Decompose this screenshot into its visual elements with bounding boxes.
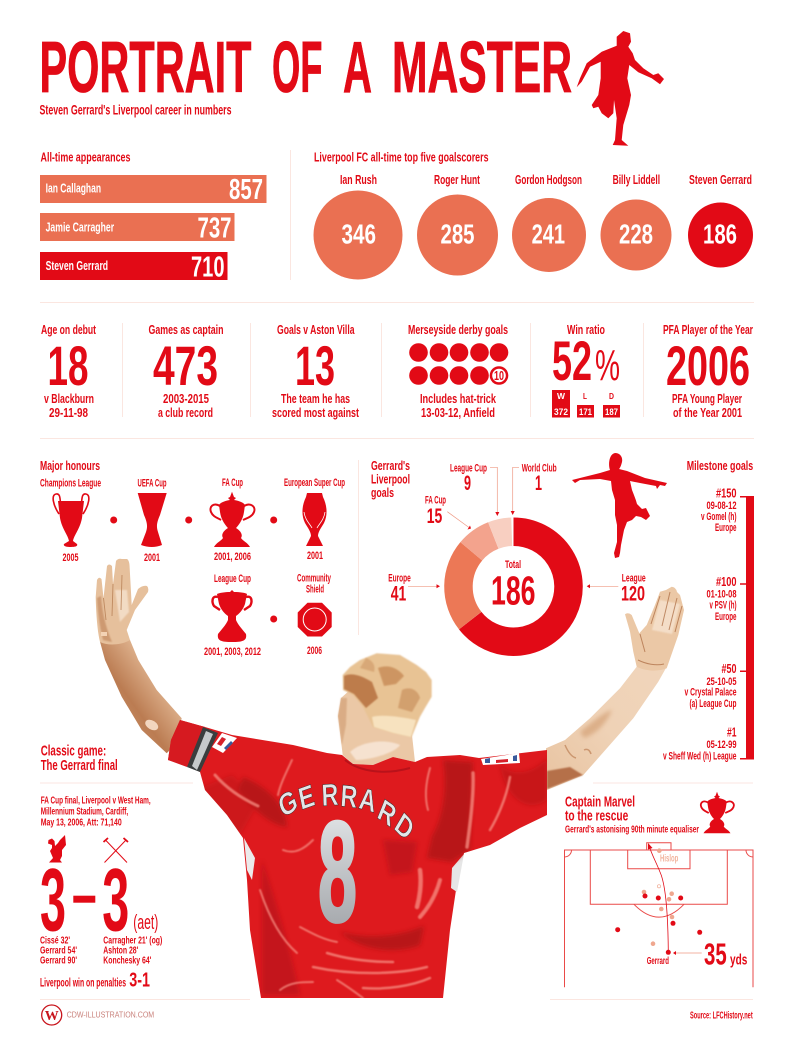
icon: West Ham crossed hammers bbox=[104, 838, 128, 862]
West Ham scorers: Ashton 28' bbox=[103, 944, 138, 956]
trophy: FA Cup: FA Cup bbox=[222, 477, 243, 489]
Liverpool scorers: Cissé 32' bbox=[40, 934, 70, 946]
stat: Merseyside derby goals: Merseyside derby goals bbox=[408, 323, 508, 337]
logo: CDW illustration: CDW-ILLUSTRATION.COM bbox=[67, 1010, 154, 1020]
milestone: #1 bbox=[663, 725, 736, 762]
heading: Captain Marvel: Captain Marvel bbox=[565, 794, 635, 811]
West Ham scorers bbox=[103, 934, 162, 966]
panel: top five goalscorers bbox=[314, 151, 753, 280]
jersey name GERRARD: GERRARD bbox=[274, 777, 419, 847]
defenders and keeper bbox=[642, 848, 674, 946]
heading: classic game: The Gerrard final bbox=[41, 757, 118, 774]
Liverpool scorers bbox=[40, 934, 77, 966]
logo: CDW illustration: W bbox=[45, 1009, 59, 1024]
stat: age on debut: 18 bbox=[48, 334, 88, 397]
label: League Cup: 9 bbox=[464, 472, 471, 495]
milestone: #50: 25-10-05 bbox=[706, 676, 736, 688]
arrow to shot distance bbox=[673, 951, 702, 955]
stat: games as captain: Games as captain bbox=[148, 323, 224, 337]
bar: Steven Gerrard bbox=[40, 252, 228, 284]
stat: age on debut: v Blackburn bbox=[44, 392, 94, 406]
score 3-3: 3 bbox=[40, 850, 66, 950]
match details: May 13, 2006, Att: 71,140 bbox=[41, 817, 122, 829]
pitch diagram bbox=[564, 843, 753, 987]
scorer: Steven Gerrard: Steven Gerrard bbox=[689, 173, 752, 187]
panel: Gerrard's Liverpool goals bbox=[371, 453, 667, 642]
scorer: Roger Hunt bbox=[417, 173, 498, 276]
milestone: #150: 09-08-12 bbox=[706, 500, 736, 512]
heading: Captain Marvel: Gerrard's astonising 90th minute equaliser bbox=[565, 823, 699, 835]
win, loss, draw boxes: L bbox=[583, 391, 587, 401]
captain's cuff bbox=[168, 720, 205, 767]
neck bbox=[338, 690, 415, 765]
donut total bbox=[491, 559, 536, 614]
milestone: #50 bbox=[684, 661, 737, 710]
stat: PFA Player of the Year bbox=[663, 323, 753, 420]
bar: Ian Callaghan: Ian Callaghan bbox=[46, 182, 101, 196]
trophy: UEFA Cup: 2001 bbox=[144, 552, 160, 564]
left arm bbox=[100, 640, 182, 753]
trophy: Champions League: Champions League bbox=[40, 478, 101, 490]
stat: PFA Player of the Year: of the Year 2001 bbox=[673, 406, 742, 420]
stat: PFA Player of the Year: PFA Player of the Year bbox=[663, 323, 753, 337]
illustration: Gerrard arms raised, seen from behind: 8 bbox=[318, 793, 357, 952]
label: Europe: 41 bbox=[391, 583, 406, 606]
bar: Jamie Carragher: 737 bbox=[198, 212, 232, 244]
heading: goals breakdown: goals bbox=[371, 486, 394, 500]
heading: goals breakdown: Liverpool bbox=[371, 472, 410, 486]
icon: small FA Cup bbox=[701, 792, 734, 833]
milestone: #100: v PSV (h) bbox=[710, 600, 737, 612]
donut chart bbox=[458, 532, 569, 642]
penalties result: Liverpool win on penalties bbox=[40, 976, 126, 990]
stat: age on debut: 29-11-98 bbox=[49, 406, 88, 420]
label: World Club: World Club bbox=[522, 463, 557, 475]
milestone: #150 bbox=[701, 485, 737, 534]
heading: classic game: Classic game: bbox=[41, 742, 106, 759]
Liverpool scorers: Gerrard 90' bbox=[40, 954, 77, 966]
heading: milestone goals: Milestone goals bbox=[687, 459, 753, 473]
stat: win ratio: % bbox=[595, 341, 620, 390]
label: World Club: 1 bbox=[535, 472, 542, 495]
heading: goalscorers: Liverpool FC all-time top five goalscorers bbox=[314, 151, 489, 165]
trophy: Community Shield: 2006 bbox=[307, 645, 322, 657]
panel: major honours bbox=[40, 459, 345, 658]
stat: win ratio: 52 bbox=[552, 329, 592, 392]
stat: win ratio: Win ratio bbox=[567, 323, 605, 337]
trophy: Community Shield bbox=[297, 572, 332, 657]
stat: goals v Aston Villa: Goals v Aston Villa bbox=[277, 323, 355, 337]
stat: win ratio bbox=[552, 323, 620, 418]
stat: goals v Aston Villa bbox=[272, 323, 360, 420]
heading: Captain Marvel: to the rescue bbox=[565, 808, 628, 825]
panel: all-time appearances bbox=[40, 151, 266, 284]
stat: goals v Aston Villa: The team he has bbox=[281, 392, 350, 406]
stat: age on debut: Age on debut bbox=[41, 323, 97, 337]
label: League: League bbox=[622, 573, 646, 585]
label: Europe bbox=[388, 573, 440, 606]
shot distance: 35 bbox=[704, 937, 727, 971]
bar: Ian Callaghan bbox=[40, 174, 266, 206]
pitch markings bbox=[564, 843, 753, 987]
milestone: #150: Europe bbox=[715, 522, 736, 534]
label: League bbox=[587, 573, 646, 606]
trophy: UEFA Cup bbox=[138, 478, 167, 564]
heading: goals breakdown: Gerrard's bbox=[371, 459, 410, 473]
milestone: #50: v Crystal Palace bbox=[684, 687, 736, 699]
title bbox=[40, 27, 572, 108]
stat: games as captain: 473 bbox=[153, 334, 218, 397]
penalties result bbox=[40, 970, 150, 992]
heading: Captain Marvel bbox=[565, 794, 699, 835]
trophy: League Cup: 2001, 2003, 2012 bbox=[204, 646, 261, 658]
win, loss, draw boxes: 372 bbox=[554, 407, 568, 417]
scorer: Ian Rush: Ian Rush bbox=[340, 173, 377, 187]
icon: player silhouette kicking bbox=[572, 453, 667, 558]
trophy: Champions League bbox=[40, 478, 101, 564]
donut total: Total bbox=[505, 559, 521, 571]
icon: player silhouette celebrating bbox=[577, 31, 664, 146]
title: OF bbox=[272, 27, 322, 108]
stat: PFA Player of the Year: PFA Young Player bbox=[672, 392, 742, 406]
stat: PFA Player of the Year: 2006 bbox=[666, 334, 750, 397]
score 3-3: 3 bbox=[102, 850, 129, 950]
scorer: Billy Liddell: Billy Liddell bbox=[613, 173, 660, 187]
donut total: 186 bbox=[491, 568, 536, 614]
score 3-3: (aet) bbox=[133, 912, 158, 934]
stat: games as captain bbox=[148, 323, 224, 420]
scorer: Steven Gerrard bbox=[688, 173, 753, 268]
heading: major honours: Major honours bbox=[40, 459, 100, 473]
title: MASTER bbox=[392, 27, 572, 108]
scorer: Billy Liddell: 228 bbox=[619, 218, 653, 250]
label: Hislop: Hislop bbox=[660, 853, 678, 865]
match details bbox=[41, 795, 151, 829]
panel: Captain Marvel bbox=[564, 782, 753, 1022]
penalties result: 3-1 bbox=[129, 970, 150, 992]
score 3-3 bbox=[40, 850, 158, 950]
Liverpool scorers: Gerrard 54' bbox=[40, 944, 77, 956]
ball path bbox=[650, 847, 668, 952]
stat: goals v Aston Villa: scored most against bbox=[272, 406, 360, 420]
bar: Jamie Carragher bbox=[40, 212, 234, 244]
milestone: #100: 01-10-08 bbox=[706, 588, 736, 600]
milestone: #1: v Sheff Wed (h) League bbox=[663, 750, 736, 762]
bar: Steven Gerrard: 710 bbox=[191, 252, 224, 284]
milestone: #150: #150 bbox=[716, 485, 736, 500]
heading: goals breakdown bbox=[371, 459, 410, 500]
match details: Millennium Stadium, Cardiff, bbox=[41, 806, 128, 818]
milestone: #50: #50 bbox=[722, 661, 736, 676]
milestone: #1: 05-12-99 bbox=[706, 739, 736, 751]
stat: Merseyside derby goals bbox=[408, 323, 508, 420]
trophy: European Super Cup bbox=[284, 477, 345, 562]
trophy: Community Shield: Community bbox=[297, 572, 331, 584]
trophy: UEFA Cup: UEFA Cup bbox=[138, 478, 167, 490]
captain's armband bbox=[187, 727, 218, 772]
bar: Jamie Carragher: Jamie Carragher bbox=[46, 221, 114, 235]
trophy: League Cup: League Cup bbox=[214, 573, 251, 585]
label: FA Cup: FA Cup bbox=[425, 494, 446, 506]
label: FA Cup bbox=[425, 494, 471, 530]
bar: Steven Gerrard: Steven Gerrard bbox=[46, 259, 108, 273]
logo: CDW illustration bbox=[42, 1005, 154, 1025]
scorer: Roger Hunt: Roger Hunt bbox=[434, 173, 481, 187]
label: League Cup: League Cup bbox=[450, 463, 487, 475]
stat: games as captain: a club record bbox=[158, 406, 213, 420]
label: League Cup bbox=[450, 463, 499, 516]
trophy: League Cup bbox=[204, 573, 261, 658]
heading: appearances: All-time appearances bbox=[40, 151, 131, 165]
panel: milestone goals bbox=[663, 459, 754, 762]
bar: Ian Callaghan: 857 bbox=[229, 174, 263, 206]
title: PORTRAIT bbox=[40, 27, 252, 108]
West Ham scorers: Konchesky 64' bbox=[103, 954, 151, 966]
stat: age on debut bbox=[41, 323, 97, 420]
milestone: #150: v Gomel (h) bbox=[701, 511, 737, 523]
milestone: #100: Europe bbox=[715, 611, 736, 623]
win, loss, draw boxes bbox=[552, 390, 620, 418]
scorer: Gordon Hodgson: Gordon Hodgson bbox=[515, 173, 582, 187]
milestone: #50: (a) League Cup bbox=[690, 698, 737, 710]
right arm bbox=[546, 667, 666, 790]
win, loss, draw boxes: D bbox=[609, 391, 614, 401]
illustration: Gerrard arms raised, seen from behind bbox=[96, 559, 684, 998]
stat: Merseyside derby goals: 13-03-12, Anfield bbox=[421, 406, 495, 420]
match details: FA Cup final, Liverpool v West Ham, bbox=[41, 795, 151, 807]
milestone: #1: #1 bbox=[727, 725, 736, 740]
trophy: FA Cup: 2001, 2006 bbox=[214, 551, 251, 563]
milestone: #100 bbox=[706, 574, 737, 623]
win, loss, draw boxes: 171 bbox=[579, 407, 592, 417]
dots: ten derby goals: 10 bbox=[494, 369, 504, 383]
subtitle: Steven Gerrard's Liverpool career in numbers bbox=[40, 102, 232, 117]
heading: classic game bbox=[41, 742, 118, 774]
West Ham scorers: Carragher 21' (og) bbox=[103, 934, 162, 946]
label: Gerrard: Gerrard bbox=[647, 955, 669, 967]
label: Europe: Europe bbox=[388, 573, 411, 585]
Liverpool players bbox=[615, 894, 702, 955]
scorer: Billy Liddell bbox=[600, 173, 672, 270]
right hand bbox=[625, 587, 684, 671]
jersey folds bbox=[195, 758, 547, 998]
trophy: Champions League: 2005 bbox=[62, 552, 78, 564]
scorer: Gordon Hodgson: 241 bbox=[532, 218, 565, 250]
scorer: Ian Rush bbox=[314, 173, 402, 280]
jersey side panels bbox=[244, 838, 255, 880]
win, loss, draw boxes: W bbox=[557, 391, 566, 401]
stat: Merseyside derby goals: Includes hat-trick bbox=[420, 392, 496, 406]
panel: classic game bbox=[40, 742, 193, 992]
scorer: Gordon Hodgson bbox=[512, 173, 586, 272]
scorer: Roger Hunt: 285 bbox=[440, 218, 474, 250]
label: League: 120 bbox=[621, 583, 645, 606]
trophy: FA Cup bbox=[210, 477, 254, 563]
stat: goals v Aston Villa: 13 bbox=[295, 334, 335, 397]
sleeve patches bbox=[212, 733, 520, 765]
left hand bbox=[96, 559, 148, 644]
win, loss, draw boxes: 187 bbox=[605, 407, 618, 417]
scorer: Steven Gerrard: 186 bbox=[703, 218, 737, 250]
shot distance: yds bbox=[730, 951, 747, 968]
jersey bbox=[168, 720, 547, 998]
milestone timeline bar bbox=[740, 496, 754, 760]
title: A bbox=[343, 27, 372, 108]
label: World Club bbox=[511, 463, 557, 515]
trophy: European Super Cup: European Super Cup bbox=[284, 477, 345, 489]
milestone: #100: #100 bbox=[716, 574, 736, 589]
hair bbox=[343, 653, 432, 737]
trophy: European Super Cup: 2001 bbox=[307, 550, 323, 562]
stat: games as captain: 2003-2015 bbox=[163, 392, 209, 406]
icon: Liverpool liver bird bbox=[48, 835, 66, 862]
scorer: Ian Rush: 346 bbox=[342, 218, 376, 250]
label: FA Cup: 15 bbox=[427, 505, 442, 528]
trophy: Community Shield: Shield bbox=[306, 584, 324, 596]
